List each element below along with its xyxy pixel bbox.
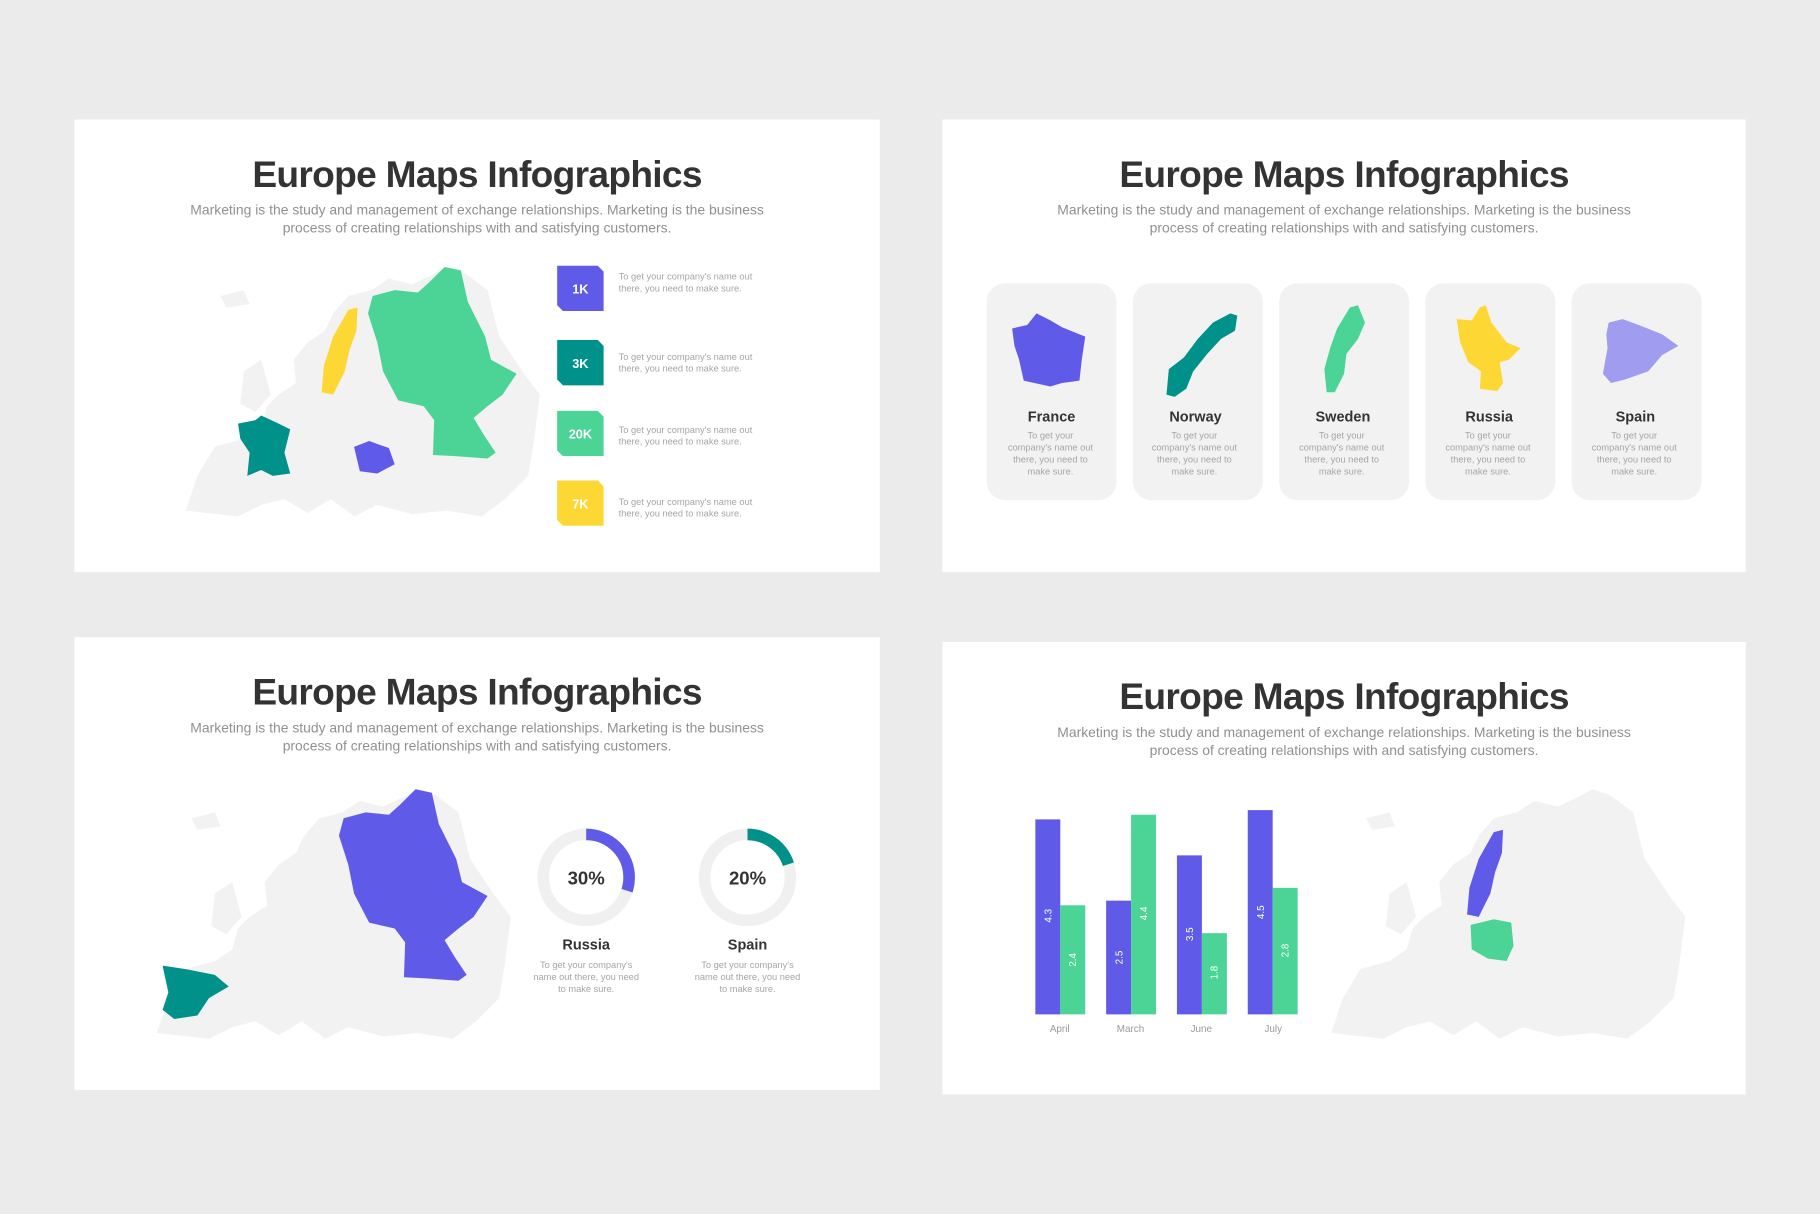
bar chart: 4.3 [1044,908,1055,923]
stat 1K: To get your company's name out [619,272,753,282]
donut: Spain 20%: name out there, you need [695,972,800,982]
stat 20K: 20K [569,427,593,442]
donut: Russia 30%: 30% [568,867,605,888]
subtitle: process of creating relationships with and satisfying customers. [1150,742,1538,758]
donut: Spain 20%: Spain [728,937,767,953]
title: Europe Maps Infographics [1119,675,1569,717]
card: Norway: To get your [1171,431,1217,441]
stat 1K: there, you need to make sure. [619,283,742,293]
card: Norway: make sure. [1171,467,1217,477]
subtitle: process of creating relationships with and satisfying customers. [283,737,671,753]
bar chart: 2.5 [1114,950,1125,964]
card: France [987,283,1117,500]
card: Russia: To get your [1465,431,1511,441]
map: europe highlighted [186,267,540,516]
card: Norway: Norway [1169,409,1222,425]
card: Sweden: To get your [1319,431,1365,441]
title: Europe Maps Infographics [252,153,702,195]
stat 20K [557,411,753,456]
card: Norway [1133,283,1263,500]
card: France: make sure. [1028,467,1073,477]
stat 3K: To get your company's name out [619,352,753,362]
card: Russia [1425,283,1555,500]
stat 20K: there, you need to make sure. [619,437,742,447]
card: Spain: company's name out [1592,443,1677,453]
donut: Russia 30%: To get your company's [540,960,633,970]
panel: top-right country cards [942,120,1746,572]
stat 1K: 1K [572,282,589,297]
card: Sweden [1279,283,1409,500]
donut: Spain 20%: 20% [729,867,766,888]
panel: bottom-right bar chart and map [942,642,1746,1094]
stat 7K [557,480,753,526]
bar chart: June [1191,1024,1213,1035]
bar chart: 3.5 [1185,927,1196,941]
bar chart: April [1050,1024,1070,1035]
stat 3K: 3K [572,356,589,371]
stat list [557,266,753,526]
card: Spain [1572,283,1702,500]
subtitle: process of creating relationships with and satisfying customers. [1150,220,1538,236]
donut: Russia 30% [533,834,639,994]
card: France: To get your [1028,431,1073,441]
donut: Russia 30%: name out there, you need [533,972,639,982]
subtitle: process of creating relationships with and satisfying customers. [283,220,671,236]
bar chart: July [1264,1024,1282,1035]
card: Sweden: make sure. [1319,467,1365,477]
panel: bottom-left map with donuts [74,637,880,1090]
card: Russia: make sure. [1465,467,1511,477]
bar chart: 4.5 [1256,905,1267,919]
subtitle: Marketing is the study and management of exchange relationships. Marketing is the business [190,202,764,218]
card: Sweden: company's name out [1299,443,1385,453]
subtitle: Marketing is the study and management of exchange relationships. Marketing is the business [1057,724,1631,740]
stat 7K: there, you need to make sure. [619,508,742,518]
donut: Russia 30%: to make sure. [558,984,614,994]
bar chart: March [1117,1024,1144,1035]
donut: Russia 30%: Russia [562,937,611,953]
card: Spain: To get your [1611,431,1657,441]
map: Russia and Spain [157,789,511,1039]
card: France: France [1028,409,1075,425]
title: Europe Maps Infographics [252,670,702,712]
panel: top-left map with values [74,120,880,572]
stat 7K: To get your company's name out [619,497,753,507]
card: Spain: Spain [1616,409,1655,425]
subtitle: Marketing is the study and management of exchange relationships. Marketing is the business [190,719,764,735]
bar chart: 4.4 [1139,906,1150,920]
card: Russia: there, you need to [1451,455,1525,465]
subtitle: Marketing is the study and management of exchange relationships. Marketing is the business [1057,202,1631,218]
card: France: there, you need to [1013,455,1088,465]
card: Norway: company's name out [1152,443,1237,453]
card: Spain: make sure. [1611,467,1657,477]
card: France: company's name out [1008,443,1093,453]
bar chart: 1.8 [1210,965,1221,979]
card: Spain: there, you need to [1597,455,1672,465]
card: Russia: Russia [1465,409,1514,425]
donut: Spain 20%: To get your company's [701,960,794,970]
stat 3K [557,340,753,385]
card: Sweden: there, you need to [1304,455,1379,465]
bar chart: 2.8 [1280,943,1291,957]
stat 3K: there, you need to make sure. [619,363,742,373]
stat 1K [557,266,753,311]
bar chart: 2.4 [1068,952,1079,967]
stat 7K: 7K [572,496,589,511]
card: Sweden: Sweden [1316,409,1370,425]
card: Norway: there, you need to [1157,455,1232,465]
card: Russia: company's name out [1445,443,1531,453]
donut: Spain 20% [695,834,800,994]
title: Europe Maps Infographics [1119,153,1569,195]
donut: Spain 20%: to make sure. [719,984,776,994]
stat 20K: To get your company's name out [619,425,753,435]
bar chart [1035,810,1298,1035]
map: Sweden and Poland [1331,789,1685,1039]
